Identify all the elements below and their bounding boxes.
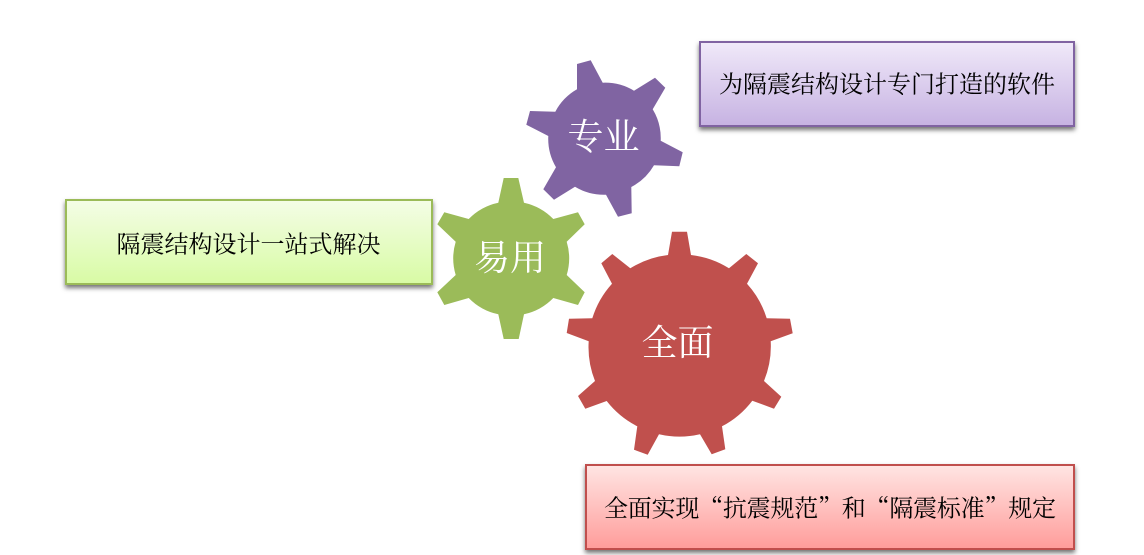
gear shape: red <box>567 232 793 455</box>
callout: 全面 description (red) <box>586 465 1074 549</box>
callout: 易用 description (green): 隔震结构设计一站式解决 <box>116 224 380 260</box>
gear shape: green <box>437 178 585 339</box>
callout: 易用 description (green) <box>66 200 432 284</box>
gear: 全面 (red) <box>567 232 793 455</box>
gear label: 专业: 专业 <box>567 109 640 160</box>
gear: 易用 (green) <box>437 178 585 339</box>
callout: 专业 description (purple): 为隔震结构设计专门打造的软件 <box>719 64 1055 100</box>
gear label: 易用: 易用 <box>474 230 546 281</box>
gear shape: purple <box>526 60 683 217</box>
callout: 全面 description (red): 全面实现“抗震规范”和“隔震标准”规定 <box>604 488 1056 524</box>
gear label: 全面: 全面 <box>641 315 714 366</box>
gear: 专业 (purple) <box>526 60 683 217</box>
callout: 专业 description (purple) <box>700 42 1074 126</box>
